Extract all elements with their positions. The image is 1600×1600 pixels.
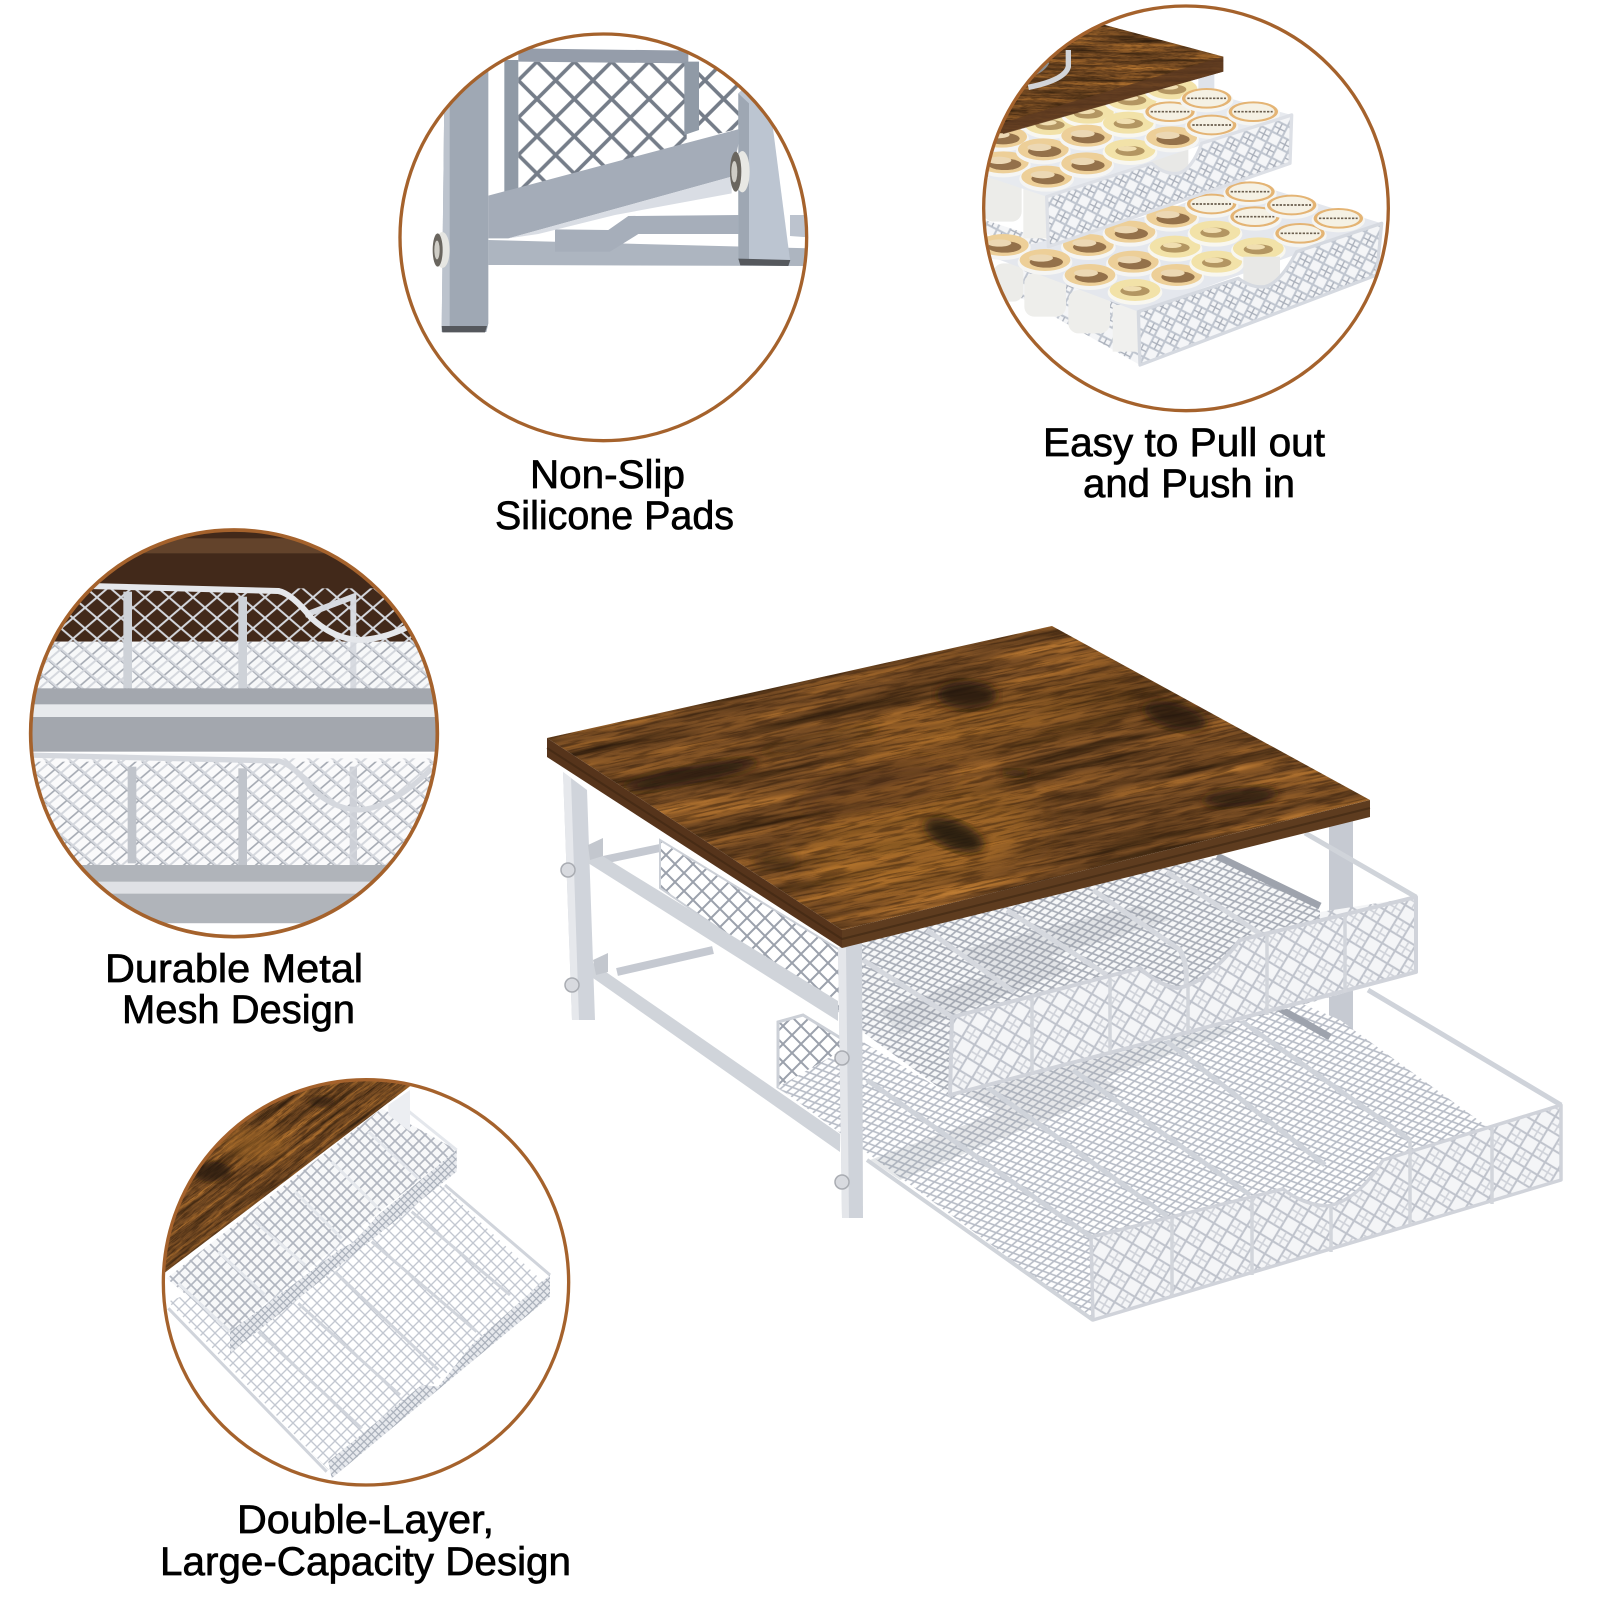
dark wood underside [54, 532, 414, 642]
dividers [867, 990, 1561, 1237]
label: easy to pull out and push in: and Push in [1083, 462, 1295, 506]
slanted side rail [488, 128, 742, 238]
wood top corner [21, 919, 552, 1426]
front mesh panel [950, 897, 1416, 1095]
back cross stubs [603, 848, 713, 972]
inner rack [305, 597, 353, 692]
upper tray front mesh [1047, 115, 1292, 247]
lower drawer shadow bands [870, 1020, 1240, 1180]
circle outline [400, 34, 807, 441]
shadow bands [880, 905, 1170, 1035]
slide rail [1277, 1007, 1330, 1037]
front mesh panel [1091, 1105, 1561, 1320]
small leg [1198, 74, 1214, 88]
lower tray front mesh [1138, 223, 1382, 365]
lower notch cup [1243, 257, 1280, 287]
upper grey band [25, 688, 445, 752]
lower tray floor [1021, 270, 1138, 364]
main product: drawer organizer [393, 398, 1561, 1320]
lower drawer floor [168, 1185, 550, 1470]
bolts [561, 863, 849, 1189]
dividers [863, 872, 1262, 1017]
screw: right [730, 151, 750, 192]
upright brackets [588, 838, 608, 975]
lower tray top plane [987, 180, 1382, 312]
front leg with pad [442, 63, 488, 332]
upper tray floor [986, 220, 1046, 244]
wood top [393, 398, 1527, 1162]
lower drawer dividers [168, 1185, 550, 1472]
rear leg with pad [738, 90, 790, 266]
lower tray cups [993, 263, 1141, 352]
lower mesh panel [25, 755, 445, 868]
upper drawer [860, 833, 1416, 1097]
lower drawer front panel [328, 1275, 550, 1478]
circle outline [31, 530, 437, 937]
leg under wood [388, 1090, 410, 1132]
circle outline [984, 6, 1388, 411]
slide rail [1217, 856, 1320, 906]
upper tray pods [974, 77, 1280, 192]
upper tray cups [983, 143, 1188, 238]
rear left leg [563, 772, 595, 1020]
upper drawer left side mesh [660, 840, 840, 1012]
circle outline [163, 1080, 569, 1485]
panel: double-layer large capacity detail [162, 1078, 570, 1487]
lower drawer floor [778, 990, 1561, 1320]
wood surface [393, 398, 1527, 1162]
upper drawer floor [167, 1108, 457, 1332]
upper drawer dividers [178, 1108, 457, 1332]
label: double-layer large-capacity design: Double-Layer, [237, 1498, 494, 1542]
lower rack [25, 762, 445, 868]
white gap behind upper mesh [54, 642, 411, 643]
lower drawer [778, 990, 1561, 1320]
white gap behind lower mesh [25, 753, 445, 867]
panel: durable metal mesh detail [25, 525, 445, 943]
right rim [1305, 833, 1416, 897]
front leg [838, 940, 863, 1218]
crossbar and bracket [488, 215, 808, 266]
label: non-slip silicone pads: Non-Slip [530, 453, 685, 497]
upper mesh panel [25, 584, 445, 692]
label: double-layer large-capacity design: Large-Capacity Design [160, 1540, 571, 1584]
label: durable metal mesh design: Durable Metal [105, 947, 363, 991]
rear right leg [1329, 820, 1353, 1085]
upper drawer front panel [230, 1150, 457, 1353]
wood side edges [547, 738, 1370, 948]
label: durable metal mesh design: Mesh Design [122, 988, 355, 1032]
right side panel [1320, 897, 1416, 1000]
lower drawer left side mesh [778, 1015, 860, 1135]
label: non-slip silicone pads: Silicone Pads [495, 494, 734, 538]
label: easy to pull out and push in: Easy to Pull out [1043, 421, 1325, 465]
screw: left [433, 232, 450, 268]
back mesh panel [504, 48, 740, 197]
wood counter [1000, 25, 1224, 134]
panel: non-slip silicone pads detail [400, 34, 808, 441]
upper drawer floor [860, 858, 1320, 1097]
upper side rail [588, 847, 838, 1021]
front posts [1172, 1128, 1492, 1297]
left bottom edge [867, 1160, 1093, 1320]
upper tray top plane [988, 100, 1288, 194]
lower tray pods [976, 181, 1365, 305]
front posts [1032, 914, 1345, 1075]
panel: easy to pull out detail [972, 6, 1388, 411]
lower side rail [593, 963, 840, 1152]
lower grey band [82, 865, 386, 924]
